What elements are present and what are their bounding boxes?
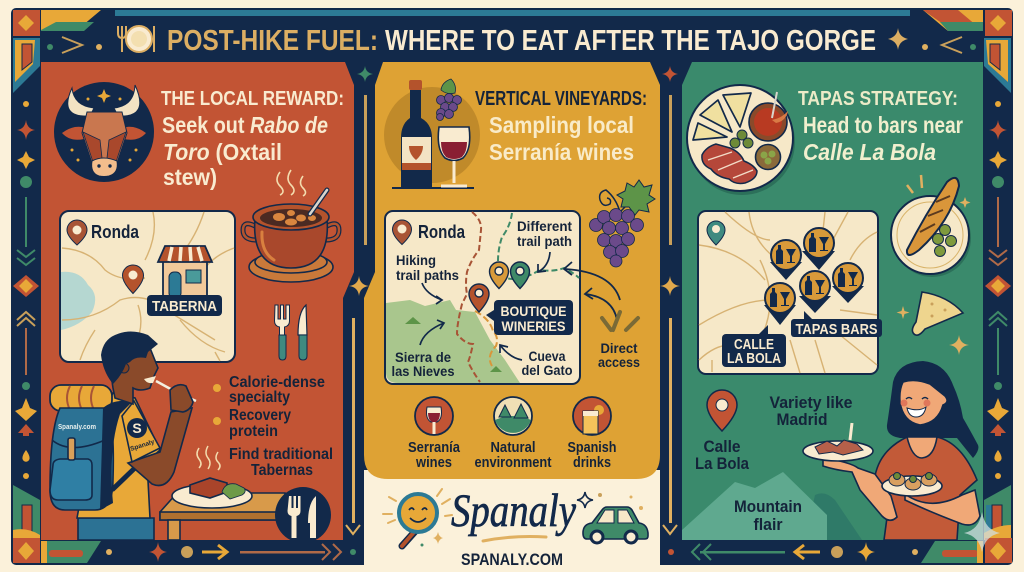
label: boutique wineries: WINERIES <box>502 318 566 334</box>
text: direct access: access <box>598 354 640 370</box>
icon: small grapes <box>436 79 462 120</box>
text: head to bars: Calle La Bola <box>803 139 936 165</box>
icon: Ronda pin <box>392 220 412 244</box>
text: sierra de las nieves: Sierra de <box>395 349 451 365</box>
label: tapas bars <box>791 311 882 338</box>
icon: natural environment <box>494 397 532 435</box>
icon: plate and cutlery <box>118 26 154 52</box>
text: different trail path: trail path <box>517 233 572 249</box>
icons: tapas bar pins <box>764 228 864 325</box>
left border ornaments <box>13 10 102 563</box>
text: head to bars <box>803 112 963 165</box>
text: variety like madrid: Madrid <box>776 410 828 429</box>
label: calle la bola: LA BOLA <box>727 351 781 367</box>
icon: tapas platter <box>687 85 795 195</box>
text: vertical vineyards heading: VERTICAL VINEYARDS: <box>475 88 647 110</box>
text: sampling local serrania wines: Sampling local <box>489 112 634 138</box>
label: boutique wineries: BOUTIQUE <box>500 303 566 319</box>
icon: car <box>583 507 648 543</box>
bullet list: calorie-dense: Calorie-dense <box>229 374 325 391</box>
map: trails and wineries <box>385 211 580 384</box>
text: Ronda: Ronda <box>91 222 140 242</box>
panel: tapas strategy <box>682 62 1000 552</box>
icon: pins <box>469 262 530 312</box>
icon: cheese wedge <box>912 292 963 335</box>
background mountain <box>682 472 862 540</box>
text: icon captions <box>408 440 616 471</box>
map: calle la bola <box>698 211 882 374</box>
text: hiking trail paths <box>396 252 459 283</box>
text: hiking trail paths: trail paths <box>396 267 459 283</box>
icon: baguette plate <box>891 175 971 277</box>
text: rabo de toro: Seek out Rabo de <box>162 112 328 138</box>
right border ornaments <box>921 10 1012 563</box>
icon: map pin <box>122 265 144 294</box>
label: tapas bars: TAPAS BARS <box>796 321 878 338</box>
icon: bull <box>54 82 154 182</box>
text: rabo de toro: Toro (Oxtail <box>163 139 282 165</box>
text: cueva del gato: Cueva <box>528 348 566 364</box>
icon: spanish drinks <box>573 397 611 435</box>
logo: spanaly <box>383 485 648 569</box>
text: icon captions: Spanish <box>568 440 616 456</box>
text: icon captions: environment <box>474 455 552 471</box>
bullet list: calorie-dense: Recovery <box>229 407 291 424</box>
illustration: hiker: Spanaly <box>129 438 156 453</box>
text: head to bars: Head to bars near <box>803 112 963 138</box>
text: mountain flair: Mountain <box>734 497 802 516</box>
panel: the local reward <box>41 62 354 540</box>
illustration: hiker <box>50 332 196 540</box>
illustration: woman with tapas <box>803 361 980 540</box>
text: icon captions: drinks <box>573 455 611 471</box>
icon: wine bottle and glass <box>384 80 480 189</box>
icon: serrania wines <box>415 397 453 435</box>
text: variety like madrid <box>770 393 852 429</box>
panel: vertical vineyards <box>364 62 660 479</box>
illustration: table and steak <box>160 446 285 540</box>
text: rabo de toro <box>162 112 328 190</box>
arrows: map callouts <box>420 252 550 360</box>
text: rabo de toro: stew) <box>163 164 217 190</box>
text: hiking trail paths: Hiking <box>396 252 436 268</box>
text: variety like madrid: Variety like <box>770 393 852 412</box>
text: tapas strategy heading: TAPAS STRATEGY: <box>798 88 958 110</box>
icon: grape bunch <box>590 180 655 267</box>
icon: stew pot <box>243 170 339 282</box>
text: sierra de las nieves <box>392 349 455 379</box>
title: POST-HIKE FUEL: <box>167 25 378 57</box>
text: cueva del gato <box>522 348 572 378</box>
icon: direct access marker <box>602 312 638 330</box>
text: calle la bola: La Bola <box>695 454 749 473</box>
bottom border ornaments <box>106 542 918 562</box>
pillar ornaments <box>340 66 691 555</box>
text: calle la bola: Calle <box>704 437 740 456</box>
arrows: direct access <box>564 262 620 320</box>
label: calle la bola <box>722 325 786 367</box>
icon: magnifier <box>383 489 452 546</box>
text: Spanaly wordmark: Spanaly <box>451 485 576 537</box>
bullet list: calorie-dense: protein <box>229 423 278 440</box>
title <box>118 25 908 57</box>
text: different trail path: Different <box>517 218 572 234</box>
label: calle la bola: CALLE <box>734 337 774 353</box>
text: mountain flair <box>734 497 802 534</box>
bullet list: calorie-dense: specialty <box>229 389 290 406</box>
icon: taberna shop <box>158 246 212 298</box>
text: sampling local serrania wines: Serranía wines <box>489 139 634 165</box>
text: direct access <box>598 340 640 370</box>
icon: cutlery badge <box>275 487 331 540</box>
text: Ronda: Ronda <box>418 222 466 242</box>
text: direct access: Direct <box>600 340 638 356</box>
text: local reward heading: THE LOCAL REWARD: <box>161 88 344 110</box>
text: icon captions: wines <box>415 455 452 471</box>
text: icon captions: Serranía <box>408 440 461 456</box>
text: cueva del gato: del Gato <box>522 362 572 378</box>
text: sampling local serrania wines <box>489 112 634 165</box>
icon: calle la bola pin <box>707 390 737 431</box>
text: sierra de las nieves: las Nieves <box>392 363 455 379</box>
icon: location pin <box>67 220 87 245</box>
icon: green pin <box>707 221 725 245</box>
text: different trail path <box>517 218 572 249</box>
illustration: hiker: Spanaly.com <box>58 422 96 431</box>
illustration: hiker: S <box>132 420 142 436</box>
map: Ronda taberna <box>60 211 235 362</box>
label: taberna: TABERNA <box>152 298 217 315</box>
text: calle la bola <box>695 437 749 473</box>
bullet list: calorie-dense: Tabernas <box>251 462 313 479</box>
text: icon captions: Natural <box>490 440 536 456</box>
decorative stars <box>896 306 969 355</box>
decorative sparkle <box>964 512 1000 552</box>
title: WHERE TO EAT AFTER THE TAJO GORGE <box>385 25 876 57</box>
label: boutique wineries <box>486 300 573 335</box>
bullet list: calorie-dense <box>213 374 333 479</box>
text: spanaly.com: SPANALY.COM <box>461 550 563 569</box>
icon: fork and knife <box>274 305 307 360</box>
text: mountain flair: flair <box>754 515 783 534</box>
bullet list: calorie-dense: Find traditional <box>229 446 333 463</box>
